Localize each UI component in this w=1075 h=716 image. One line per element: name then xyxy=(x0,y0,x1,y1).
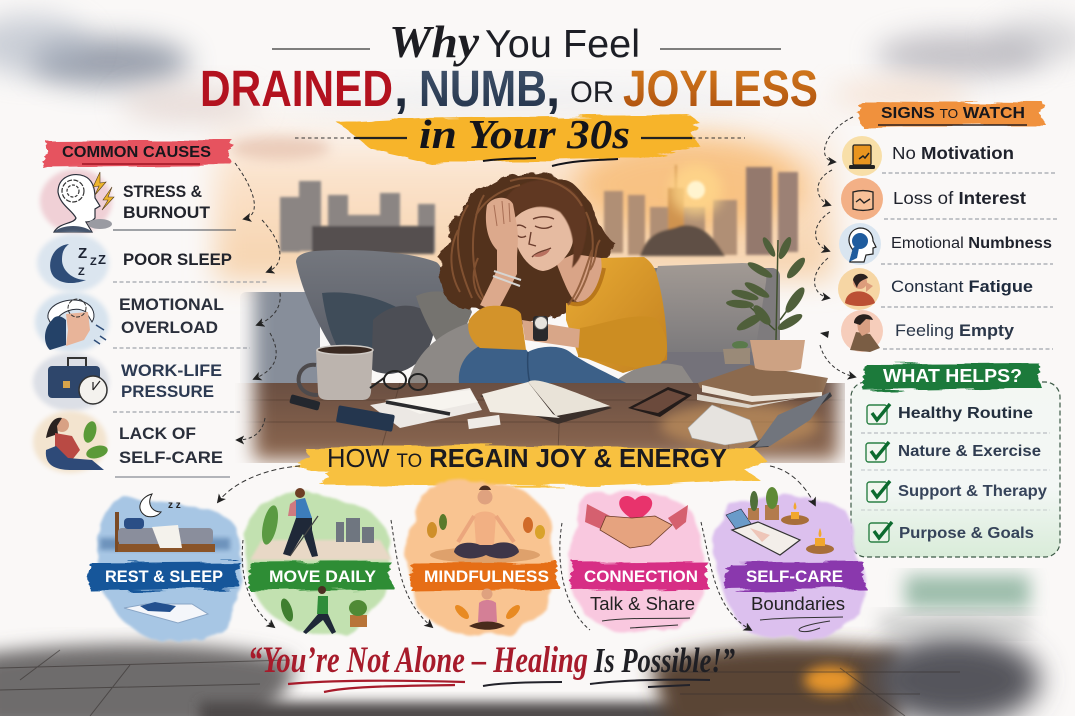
cause: poor sleep: Z xyxy=(98,252,106,267)
sweater body xyxy=(566,257,667,373)
cause: lack of self-care xyxy=(33,411,230,477)
title line 1 xyxy=(272,16,781,67)
eyes, brows, nose and mouth xyxy=(515,217,554,257)
panel: common causes xyxy=(33,140,267,477)
hair strands xyxy=(451,178,600,305)
card: self-care: SELF-CARE xyxy=(746,567,843,586)
title line 2 xyxy=(200,60,818,117)
title line 2: , xyxy=(394,60,408,117)
title line 2: DRAINED xyxy=(200,60,393,117)
smartphone xyxy=(628,387,692,417)
title line 3 on yellow brush: in Your 30s xyxy=(419,111,630,157)
title line 2: NUMB xyxy=(419,60,547,117)
card: rest and sleep xyxy=(88,494,241,641)
woman with hand on her head xyxy=(438,172,667,384)
sign: emotional numbness xyxy=(839,223,1053,265)
item: nature and exercise xyxy=(861,442,1050,470)
sign: emotional numbness: Emotional Numbness xyxy=(891,235,1052,252)
card: connection xyxy=(570,490,710,632)
dashed panel frame xyxy=(851,382,1060,557)
stacked books xyxy=(697,365,828,408)
potted plant xyxy=(723,235,808,371)
finger lines xyxy=(494,201,510,226)
title line 1: You Feel xyxy=(485,23,640,66)
item: purpose and goals: Purpose & Goals xyxy=(899,525,1034,542)
mouth fill xyxy=(533,249,550,257)
sofa and cushions xyxy=(240,250,780,387)
mattress xyxy=(124,604,208,623)
wristwatch xyxy=(533,316,548,341)
card: move daily xyxy=(245,488,394,635)
left sleeve xyxy=(468,306,526,350)
sign: feeling empty xyxy=(841,310,1053,352)
walker xyxy=(283,488,318,557)
small plants xyxy=(279,597,367,627)
cause: stress and burnout: BURNOUT xyxy=(123,203,211,222)
forearm xyxy=(522,320,584,348)
face xyxy=(512,206,574,271)
small walker xyxy=(303,586,336,634)
card: rest and sleep: REST & SLEEP xyxy=(105,567,223,586)
title line 2: , xyxy=(546,60,560,117)
side leaves xyxy=(427,514,545,539)
heading: signs to watch: SIGNS TO WATCH xyxy=(881,105,1025,122)
card: connection: Talk & Share xyxy=(590,594,695,614)
cause: work-life pressure xyxy=(33,353,240,412)
arrows: recovery cards xyxy=(218,466,815,630)
cause: emotional overload: OVERLOAD xyxy=(121,318,218,337)
central scene wrapper xyxy=(235,164,845,463)
moon xyxy=(140,494,161,517)
card: self-care xyxy=(716,487,866,641)
handshake xyxy=(585,504,688,548)
jeans shading xyxy=(528,352,530,384)
panel: what helps xyxy=(851,363,1060,557)
cause: lack of self-care: LACK OF xyxy=(119,424,196,443)
bed xyxy=(115,512,215,552)
sign: feeling empty: Feeling Empty xyxy=(895,321,1015,340)
cause: poor sleep: Z xyxy=(90,256,97,268)
cause: poor sleep: POOR SLEEP xyxy=(123,250,232,269)
jeans xyxy=(458,346,626,383)
city skyline at sunset xyxy=(280,165,798,256)
panel: signs to watch xyxy=(838,102,1057,352)
hair front xyxy=(505,180,587,268)
cause: stress and burnout: STRESS & xyxy=(123,182,202,201)
fern xyxy=(259,504,281,546)
meditating figure xyxy=(454,486,519,558)
hair back xyxy=(438,172,616,325)
bracelets xyxy=(493,271,521,286)
card: mindfulness: MINDFULNESS xyxy=(424,567,549,586)
card: self-care: Boundaries xyxy=(751,594,845,614)
card: move daily: MOVE DAILY xyxy=(269,567,377,586)
cause: emotional overload: EMOTIONAL xyxy=(119,295,224,314)
heading: what helps xyxy=(863,363,1042,391)
sign: no motivation: No Motivation xyxy=(892,143,1014,163)
heart xyxy=(619,496,652,522)
cause: poor sleep: Z xyxy=(78,266,85,278)
sign: loss of interest xyxy=(841,178,1057,220)
section heading: how to regain joy and energy: HOW TO REGAIN JOY & ENERGY xyxy=(327,443,727,473)
floor at the bottom xyxy=(0,575,1040,716)
books and candles xyxy=(726,487,834,555)
sweater collar xyxy=(570,268,604,304)
card: connection: CONNECTION xyxy=(584,567,698,586)
coffee table xyxy=(235,383,845,463)
sign: constant fatigue xyxy=(838,268,1053,310)
sign: constant fatigue: Constant Fatigue xyxy=(891,277,1033,296)
section heading: how to regain joy and energy xyxy=(292,443,766,486)
heading: common causes: COMMON CAUSES xyxy=(62,144,211,161)
title line 2: OR xyxy=(570,76,614,109)
cause: poor sleep xyxy=(37,234,267,292)
coffee mug xyxy=(299,346,373,400)
sign: no motivation xyxy=(842,136,1055,176)
small meditating figure xyxy=(453,588,522,630)
card: mindfulness xyxy=(406,483,560,637)
cause: stress and burnout xyxy=(40,169,236,233)
cause: lack of self-care: SELF-CARE xyxy=(119,448,223,467)
heading: common causes xyxy=(42,140,233,167)
item: support and therapy xyxy=(861,481,1050,510)
card: rest and sleep: z z xyxy=(168,500,181,511)
banner xyxy=(88,562,241,591)
city xyxy=(336,518,374,543)
arrows: signs xyxy=(815,117,855,377)
heading: what helps: WHAT HELPS? xyxy=(883,366,1022,386)
closing quote: Is Possible!” xyxy=(593,641,735,680)
open book xyxy=(480,380,612,424)
cause: work-life pressure: PRESSURE xyxy=(121,382,214,401)
glasses xyxy=(370,371,427,390)
cause: poor sleep: Z xyxy=(78,245,87,262)
item: healthy routine xyxy=(861,404,1050,433)
item: nature and exercise: Nature & Exercise xyxy=(898,443,1041,460)
item: support and therapy: Support & Therapy xyxy=(898,483,1047,500)
title line 1: Why xyxy=(389,16,480,67)
sun glow xyxy=(670,164,722,216)
item: purpose and goals xyxy=(869,522,1034,542)
title line 3 on yellow brush xyxy=(295,111,745,166)
title block xyxy=(200,16,818,166)
cause: work-life pressure: WORK-LIFE xyxy=(121,361,222,380)
title line 2: JOYLESS xyxy=(623,60,818,117)
laptop and crumpled paper xyxy=(688,392,832,448)
arrows: causes xyxy=(235,163,280,440)
cause: emotional overload xyxy=(35,292,250,352)
sign: loss of interest: Loss of Interest xyxy=(893,188,1026,208)
closing quote: “You’re Not Alone – Healing xyxy=(248,640,588,681)
background: watercolor sky and clouds xyxy=(0,15,1075,280)
item: healthy routine: Healthy Routine xyxy=(898,405,1033,422)
neck and chest xyxy=(556,254,602,302)
right sleeve xyxy=(578,316,667,368)
desk clutter: keys, notebook, papers and pen xyxy=(289,388,501,432)
forearm and raised hand xyxy=(480,198,518,312)
heading: signs to watch xyxy=(858,102,1045,127)
